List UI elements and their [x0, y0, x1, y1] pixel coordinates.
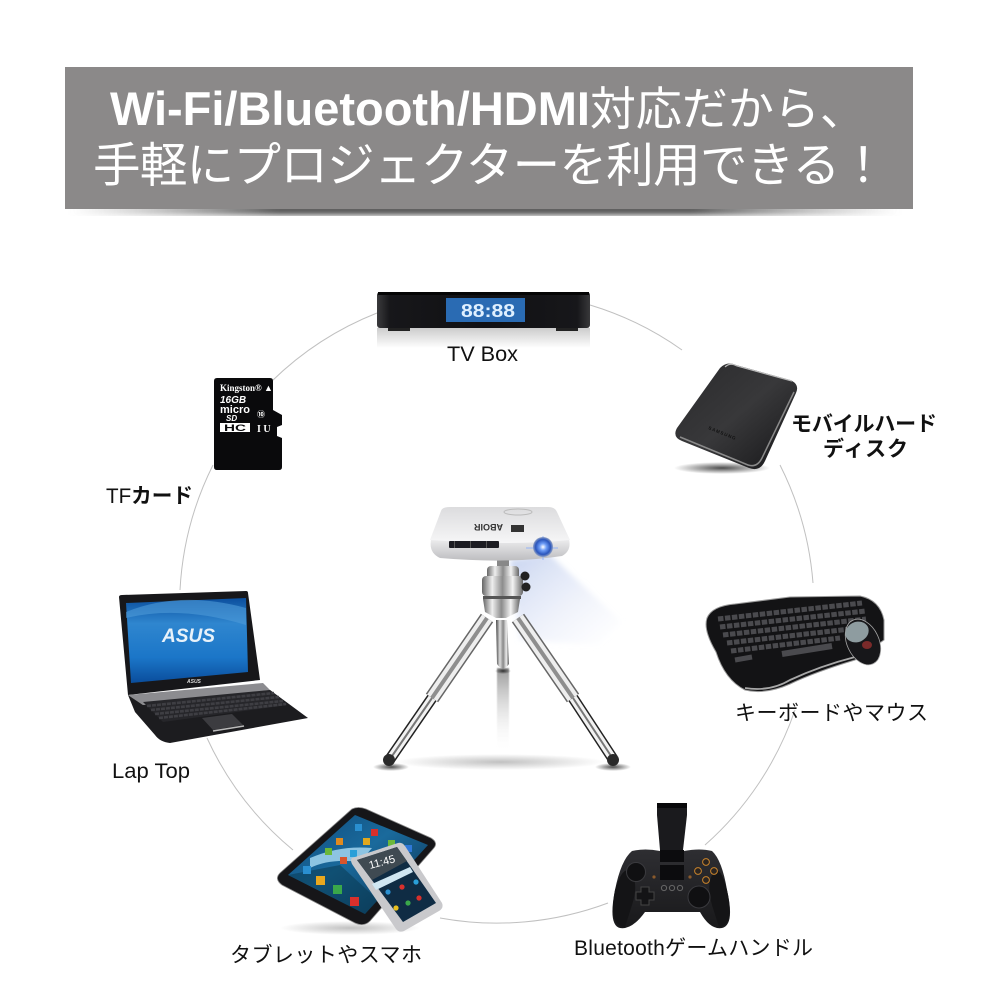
tripod legs [383, 618, 619, 766]
label: Bluetooth game controller: Bluetoothゲームハンドル [574, 937, 813, 960]
icon: micro SD card: ⑩ [257, 410, 265, 419]
label: mobile hard disk: ディスク [823, 437, 908, 461]
label: keyboard and mouse: キーボードやマウス [735, 702, 928, 725]
label: mobile hard disk: モバイルハード [791, 413, 937, 436]
icon: laptop: ASUS [186, 679, 202, 685]
center: projector on tripod [373, 507, 631, 771]
projector body [430, 507, 570, 561]
icon: micro SD card: micro [220, 404, 250, 416]
icon: laptop [119, 591, 308, 743]
icon: keyboard and mouse [706, 596, 888, 692]
icon: game controller [612, 803, 730, 928]
icon: external hard disk: SAMSUNG [708, 425, 737, 441]
icon: external hard disk [674, 364, 797, 474]
light beam [510, 553, 622, 645]
ball head [482, 560, 530, 618]
label: tablet and smartphone: タブレットやスマホ [230, 944, 422, 967]
header banner [65, 67, 913, 215]
icon: micro SD card: SD [226, 414, 237, 423]
title: Wi-Fi/Bluetooth/HDMI対応だから、 [110, 82, 866, 135]
label: mobile hard disk [791, 413, 937, 461]
icon: micro SD card: HC [224, 423, 247, 433]
projector body: ABOIR [474, 522, 503, 532]
icon: micro SD card: 16GB [220, 395, 246, 406]
icon: micro SD card [214, 378, 282, 470]
icon: TV box: 88:88 [461, 301, 515, 321]
title: 手軽にプロジェクターを利用できる！ [93, 140, 887, 193]
label: Lap Top: Lap Top [112, 759, 190, 783]
icon: tablet and smartphone: 11:45 [368, 853, 397, 872]
icon: TV box [377, 292, 590, 348]
icon: micro SD card: I U [257, 424, 271, 435]
label: TF card: TFカード [106, 485, 193, 508]
label: TV Box: TV Box [447, 342, 518, 366]
icon: tablet and smartphone [277, 808, 443, 935]
icon: laptop: ASUS [161, 626, 215, 647]
tripod shadows [373, 668, 631, 771]
icon: micro SD card: Kingston® ▲ [220, 383, 273, 393]
title [93, 82, 887, 193]
connection circle arcs [180, 305, 813, 923]
